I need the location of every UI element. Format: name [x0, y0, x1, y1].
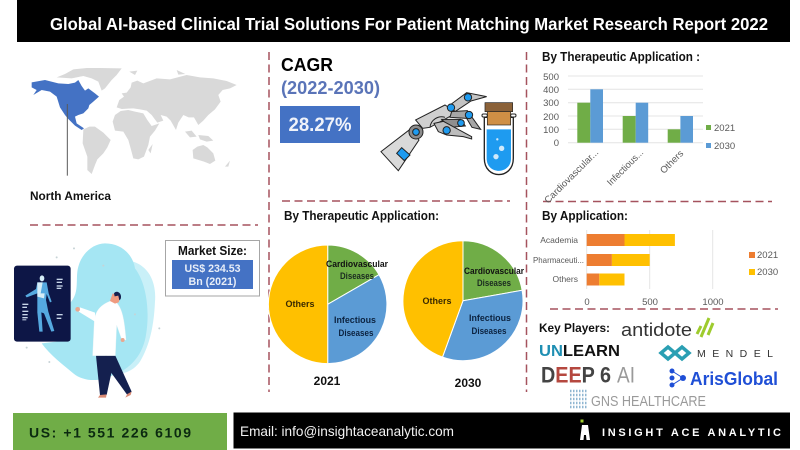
- pie chart 2030: Others: [422, 296, 452, 307]
- market size box: [166, 240, 260, 296]
- column chart: Cardiovascular...: [542, 147, 601, 206]
- logo: ArisGlobal: ArisGlobal: [690, 369, 778, 389]
- column chart: Others: [658, 148, 686, 176]
- scan panel: [14, 266, 71, 342]
- CAGR value: [280, 106, 360, 143]
- CAGR heading: CAGR: [281, 54, 333, 75]
- map: North America highlighted: [32, 80, 99, 130]
- bar chart legend: 2030: [757, 267, 778, 278]
- market size value: [172, 260, 253, 289]
- doctor: [75, 292, 132, 398]
- key players heading: Key Players:: [539, 321, 610, 335]
- brand logo mark: [580, 420, 590, 440]
- column chart: 300: [543, 98, 559, 109]
- column chart: 0: [554, 138, 559, 149]
- pie chart 2021: Diseases: [340, 271, 374, 282]
- stacked bar chart: Others: [552, 274, 578, 284]
- pie chart 2030: Infectious: [469, 313, 511, 324]
- pie chart 2021: Infectious: [334, 315, 376, 326]
- stacked bar chart: Pharmaceuti...: [533, 255, 584, 265]
- bar chart heading: By Application:: [542, 209, 628, 223]
- brand name: INSIGHT ACE ANALYTIC: [602, 427, 781, 439]
- pie chart 2021: [268, 245, 388, 388]
- logo: antidote: [621, 318, 713, 340]
- pie chart 2030: Diseases: [472, 326, 506, 337]
- stacked bar chart: 500: [642, 297, 658, 308]
- email: Email: info@insightaceanalytic.com: [240, 423, 454, 439]
- bar chart legend: 2021: [757, 250, 778, 261]
- background blob: [42, 243, 155, 380]
- logo: antidote: antidote: [621, 320, 692, 340]
- stacked bar chart: 0: [584, 297, 590, 308]
- pie chart 2030: [403, 241, 524, 390]
- logo: Deep 6 AI: DEEP 6: [541, 362, 611, 388]
- pie year 2021: 2021: [314, 374, 341, 388]
- robot hand: [381, 93, 487, 171]
- world map panel: [32, 68, 237, 176]
- column chart legend: [706, 123, 735, 152]
- footer: phone: US: +1 551 226 6109: [29, 424, 191, 440]
- pie section heading: By Therapeutic Application:: [284, 209, 439, 223]
- logo: Unlearn: UNLEARN: [539, 343, 620, 360]
- icon: robot hand with test tube: [381, 93, 516, 175]
- pie chart 2030: Diseases: [477, 278, 511, 289]
- footer: phone: [13, 413, 227, 450]
- column chart: 500: [543, 72, 559, 83]
- pie chart 2021: Others: [286, 299, 314, 310]
- column chart: [542, 72, 735, 206]
- column chart: Infectious...: [605, 147, 646, 188]
- footer: email and brand: [234, 412, 790, 448]
- CAGR value: 28.27%: [288, 115, 352, 136]
- logo: GNS Healthcare: [570, 391, 706, 410]
- test tube: [482, 103, 516, 175]
- pie chart 2021: Cardiovascular: [326, 259, 388, 270]
- illustration: doctor with body scan: [14, 243, 160, 398]
- pie chart 2030: Cardiovascular: [464, 266, 524, 277]
- stacked bar chart: 1000: [702, 297, 724, 308]
- logo: Deep 6 AI: AI: [617, 362, 635, 388]
- column chart: 200: [543, 112, 559, 123]
- market size heading: Market Size:: [178, 244, 247, 258]
- region label: North America: [30, 189, 111, 203]
- column chart legend: 2021: [714, 123, 735, 134]
- logo: GNS Healthcare: GNS HEALTHCARE: [591, 393, 706, 410]
- column chart: 100: [543, 125, 559, 136]
- map: rest of world: [57, 68, 237, 174]
- bar chart legend: [749, 250, 778, 278]
- column chart: 400: [543, 85, 559, 96]
- stacked bar chart: Academia: [540, 235, 578, 245]
- column chart heading: By Therapeutic Application :: [542, 50, 700, 64]
- market size value: US$ 234.53: [184, 263, 240, 275]
- logo: Mendel: MENDEL: [697, 348, 773, 360]
- stacked bar chart: [533, 230, 778, 308]
- map pointer line: [66, 104, 69, 176]
- pie chart 2021: Diseases: [338, 328, 374, 339]
- pie year 2030: 2030: [455, 376, 482, 390]
- CAGR period: (2022-2030): [281, 77, 380, 98]
- title banner: Global AI-based Clinical Trial Solutions For Patient Matching Market Research Report 2022: [50, 14, 768, 34]
- column chart legend: 2030: [714, 141, 735, 152]
- title banner: [17, 0, 790, 42]
- market size value: Bn (2021): [188, 276, 237, 288]
- logo: Mendel: [661, 347, 773, 360]
